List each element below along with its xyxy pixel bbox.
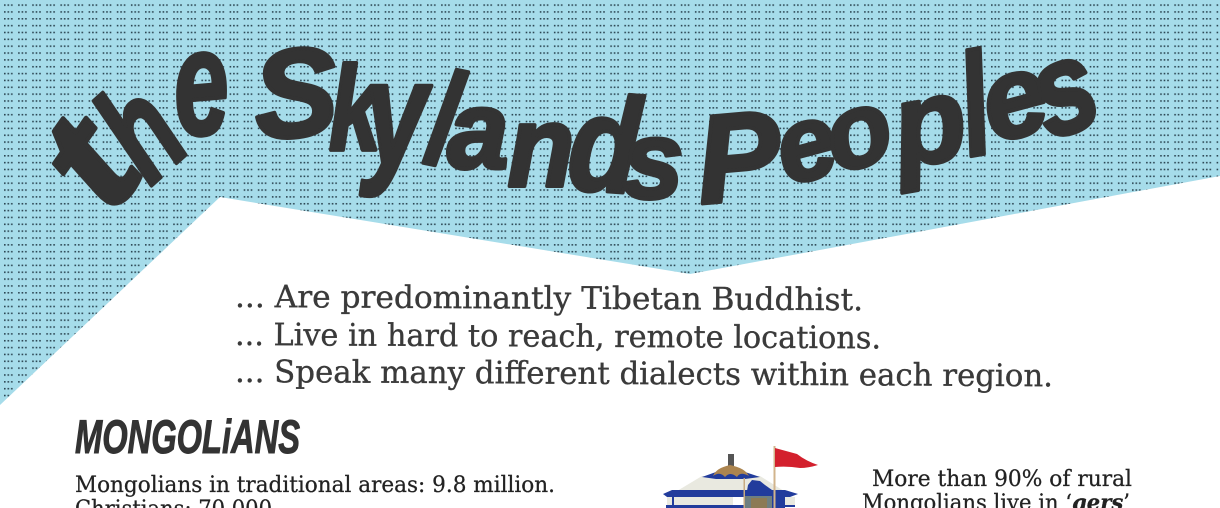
title: P: [691, 85, 787, 231]
ger caption text: [862, 467, 1132, 508]
title: l: [415, 43, 474, 197]
intro text block: [235, 279, 1053, 394]
title: S: [248, 21, 343, 167]
title: [2, 0, 1116, 236]
title: n: [508, 81, 574, 211]
white lower panel: [0, 176, 1220, 508]
title: s: [622, 99, 684, 222]
ger caption text: More than 90% of rural: [872, 467, 1132, 492]
title: l: [946, 22, 1004, 187]
intro text block: ... Are predominantly Tibetan Buddhist.: [235, 279, 863, 318]
title: p: [879, 51, 976, 194]
title: k: [329, 42, 386, 176]
title: o: [812, 66, 904, 196]
intro text block: ... Speak many different dialects within each region.: [235, 354, 1053, 394]
title: h: [65, 53, 214, 209]
title: e: [166, 0, 235, 168]
title: d: [564, 67, 647, 223]
heading: Mongolians: MONGOLiANS: [75, 410, 300, 463]
intro text block: ... Live in hard to reach, remote locations.: [235, 317, 881, 356]
Mongolians facts text: Mongolians in traditional areas: 9.8 million.: [75, 473, 555, 498]
title: t: [2, 86, 178, 236]
title: s: [1009, 9, 1116, 167]
title: e: [762, 80, 849, 208]
title: e: [966, 27, 1061, 167]
title: a: [447, 69, 509, 192]
icon: ger with flag: [663, 446, 818, 508]
title: y: [360, 30, 433, 198]
